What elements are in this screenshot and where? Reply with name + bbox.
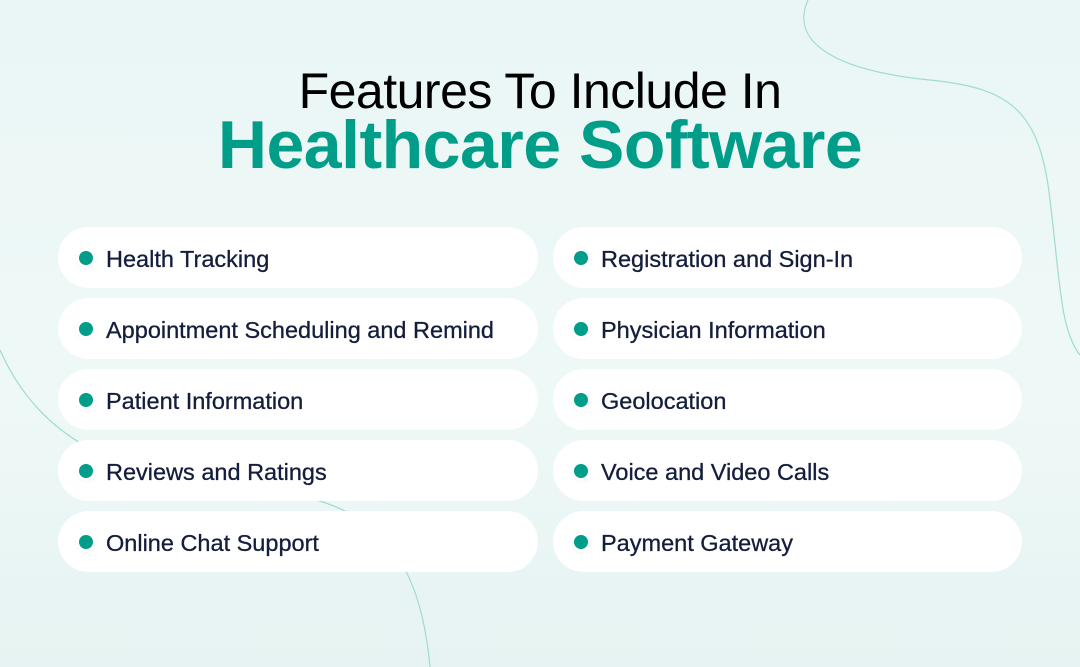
item: Online Chat: [58, 511, 538, 572]
item: Reviews: [58, 440, 538, 501]
item: Voice and Video: [553, 440, 1022, 501]
item: Appointment: Appointment Scheduling and Remind: [106, 317, 494, 343]
item: Online Chat: Online Chat Support: [106, 530, 319, 556]
subtitle: Healthcare Software: [218, 107, 862, 183]
item: Health Tracking: [58, 227, 538, 288]
item: Reviews: Reviews and Ratings: [106, 459, 327, 485]
item: Patient Information: [58, 369, 538, 430]
item: Physician: Physician Information: [601, 317, 826, 343]
item: Payment: Payment Gateway: [601, 530, 793, 556]
item: Health Tracking: Health Tracking: [106, 246, 269, 272]
item: Registration: [553, 227, 1022, 288]
item: Payment: [553, 511, 1022, 572]
item: Patient Information: Patient Information: [106, 388, 303, 414]
item: Physician: [553, 298, 1022, 359]
item: Registration: Registration and Sign-In: [601, 246, 853, 272]
title: Features To Include In: [299, 63, 781, 119]
item: Geolocation: [553, 369, 1022, 430]
item: Voice and Video: Voice and Video Calls: [601, 459, 829, 485]
item: Appointment: [58, 298, 538, 359]
item: Geolocation: Geolocation: [601, 388, 726, 414]
